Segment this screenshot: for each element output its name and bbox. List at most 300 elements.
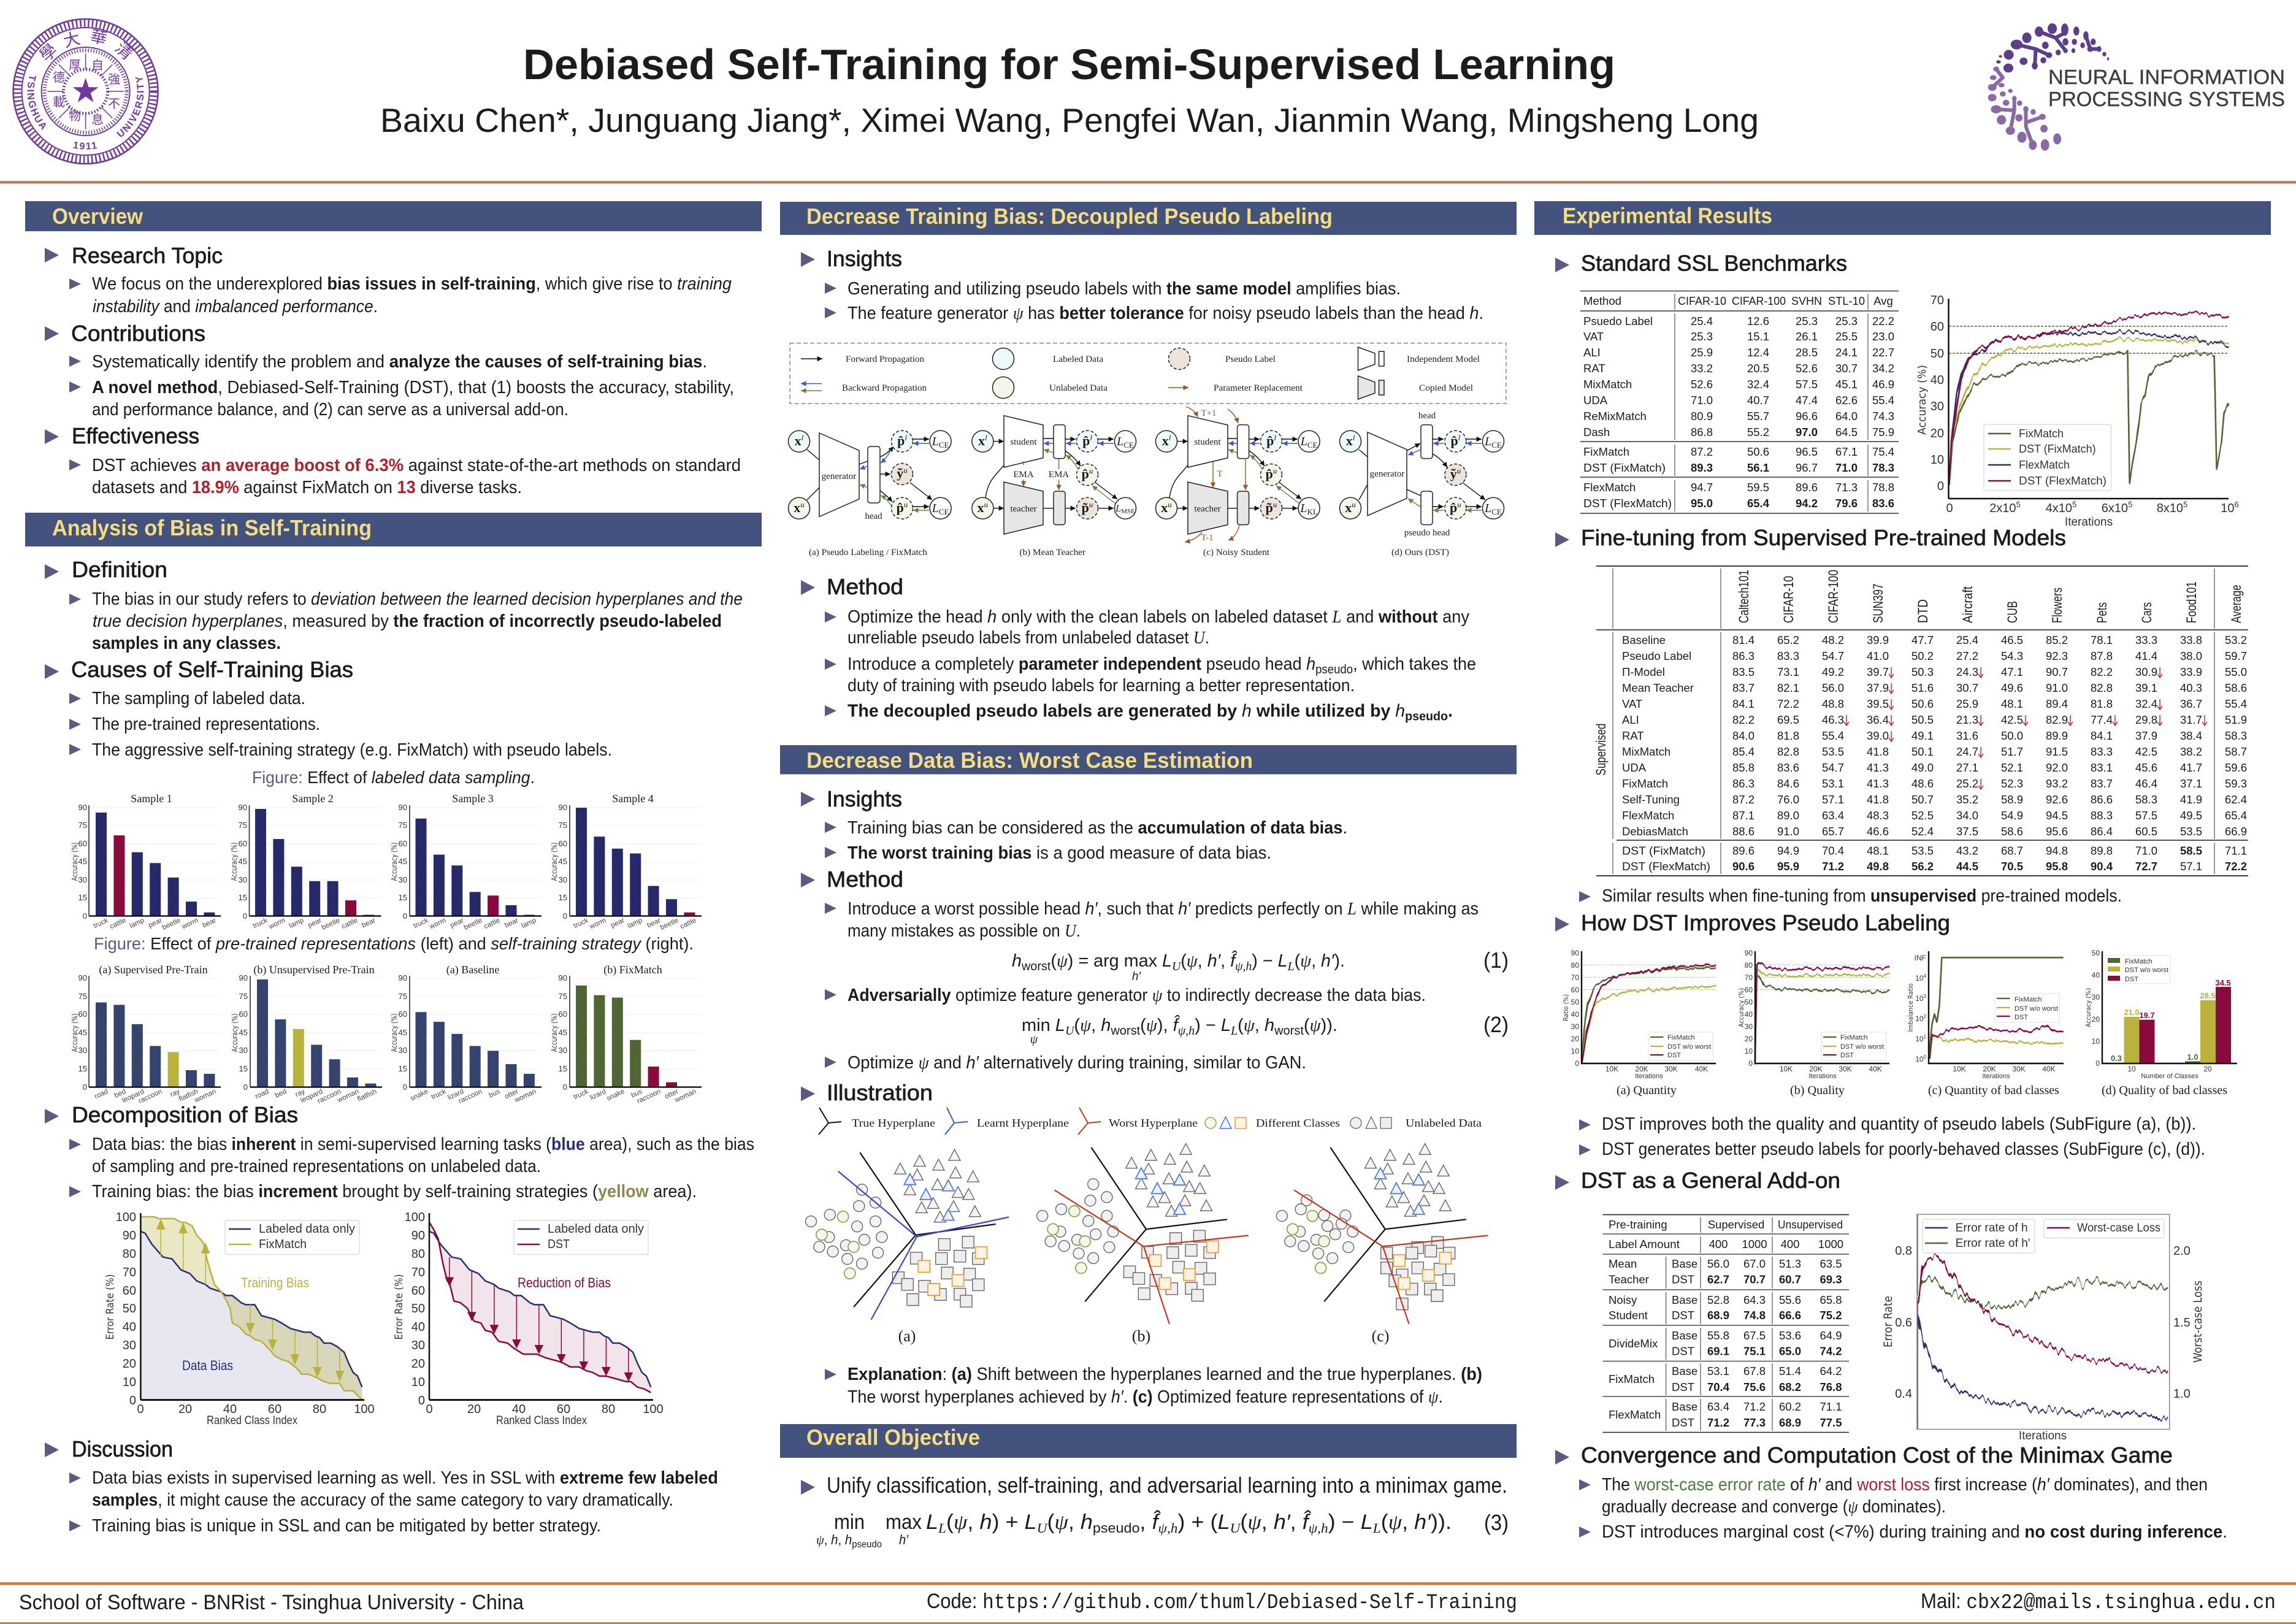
line chart: quantity: 20 <box>1571 1035 1579 1043</box>
text block: pseudo labeling improvements <box>1579 1114 2205 1159</box>
text block: decomposition <box>69 1135 754 1201</box>
bar chart: baseline: 0 <box>403 1082 407 1092</box>
footer: mail: Mail: cbx22@mails.tsinghua.edu.cn <box>1921 1590 2276 1615</box>
bar chart: sample 2: 45 <box>239 857 247 866</box>
table: fine-tuning: 82.1 <box>1777 681 1799 694</box>
table: fine-tuning: 55.4 <box>1822 729 1844 742</box>
text block: convergence: DST introduces marginal cost (<7%) during training and no cost during inference. <box>1602 1522 2227 1542</box>
line chart: quantity of bad classes: 10K <box>1953 1065 1966 1073</box>
table: SSL benchmarks: CIFAR-100 <box>1732 294 1786 307</box>
table: SSL benchmarks: 25.9 <box>1691 346 1713 359</box>
table: fine-tuning: 72.2 <box>2225 860 2247 873</box>
table: SSL benchmarks: 15.1 <box>1747 330 1769 343</box>
table: fine-tuning: 50.5 <box>1911 713 1934 726</box>
bar chart: sample 1: truck <box>93 917 109 930</box>
text block: method: Introduce a completely parameter independent pseudo head h <box>848 654 1316 674</box>
table: fine-tuning: Π-Model <box>1622 665 1665 678</box>
table: add-on results: Pre-training <box>1609 1218 1667 1231</box>
table: fine-tuning: 91.0 <box>1777 825 1799 838</box>
equation 2: ψ, h <box>1080 1016 1111 1035</box>
table: fine-tuning: 53.5 <box>1911 844 1934 857</box>
bar chart: quality of bad classes: 1.0 <box>2187 1052 2198 1062</box>
text block: method: pseudo <box>1315 663 1353 676</box>
table: fine-tuning: 43.2 <box>1956 844 1978 857</box>
table: fine-tuning: 58.6 <box>2225 681 2247 694</box>
line chart: accuracy over iterations: 30 <box>1931 400 1944 413</box>
bar chart: sample 4: Accuracy (%) <box>550 842 559 881</box>
table: fine-tuning: 50.7 <box>1911 793 1934 806</box>
line chart: accuracy over iterations: 0 <box>1937 480 1944 493</box>
heading: decrease data bias: Decrease Data Bias: Worst Case Estimation <box>806 748 1253 773</box>
table: add-on results: Base <box>1672 1400 1697 1413</box>
bar chart: sample 1: bear <box>201 917 217 929</box>
table: SSL benchmarks: 87.2 <box>1691 445 1713 458</box>
table: SSL benchmarks: DST (FlexMatch) <box>1583 497 1672 510</box>
bar chart: sample 1: 30 <box>78 875 87 884</box>
diagram: ours DST: L <box>1485 435 1491 448</box>
line chart: accuracy over iterations: DST (FlexMatch) <box>2019 475 2107 487</box>
table: fine-tuning: 25.4 <box>1956 634 1978 646</box>
table: fine-tuning: 83.6 <box>1777 761 1799 774</box>
bar chart: sample 2: worm <box>267 917 286 931</box>
chart: training bias: Error Rate (%) <box>104 1274 117 1339</box>
table: fine-tuning: 41.4 <box>2135 649 2157 662</box>
line chart: accuracy over iterations: 2x10 <box>1989 500 2021 515</box>
line chart: quantity: 20K <box>1635 1065 1648 1073</box>
diagram: pseudo labeling fixmatch <box>789 431 951 557</box>
text block: definition: samples in any classes. <box>92 634 281 653</box>
table: fine-tuning: 81.8 <box>1777 729 1799 742</box>
diagram: ours DST: u <box>1457 466 1461 475</box>
table: fine-tuning: Baseline <box>1622 634 1666 646</box>
equation 2: min L <box>1022 1016 1065 1035</box>
table: fine-tuning: 50.3 <box>1911 665 1934 678</box>
diagram: noisy student: teacher <box>1194 504 1221 514</box>
table: SSL benchmarks: 28.5 <box>1796 346 1818 359</box>
table: SSL benchmarks: 25.3 <box>1691 330 1713 343</box>
text block: unify: Unify classification, self-training, and adversarial learning into a minimax game. <box>827 1473 1507 1498</box>
table: fine-tuning: SUN397 <box>1870 584 1886 623</box>
line chart: accuracy over iterations: 5 <box>2183 500 2187 509</box>
table: fine-tuning: 59.3 <box>2225 777 2247 790</box>
chart: reduction of bias: Error Rate (%) <box>393 1274 405 1339</box>
line chart: error rate and worst-case loss: 0.4 <box>1895 1387 1912 1401</box>
equation 3: ) <box>1328 1511 1336 1534</box>
line chart: quantity: 40 <box>1571 1010 1579 1019</box>
diagram: ours DST: x <box>1345 500 1352 515</box>
table: fine-tuning: 57.1 <box>1822 793 1844 806</box>
diagram: pseudo labeling fixmatch: x <box>795 433 802 448</box>
table: SSL benchmarks: 55.4 <box>1872 394 1894 407</box>
equation 3: , <box>1139 1511 1146 1534</box>
bar chart: sample 2: 90 <box>239 803 247 812</box>
table: fine-tuning: 55.4 <box>2225 697 2247 710</box>
legend: hyperplanes: Different Classes <box>1256 1117 1340 1129</box>
heading: analysis of bias <box>25 513 762 546</box>
table: fine-tuning: 82.9 <box>2046 713 2068 726</box>
table: fine-tuning: 50.2 <box>1911 649 1934 662</box>
bar chart: baseline: lizard <box>446 1088 465 1101</box>
table: fine-tuning: 49.1 <box>1911 729 1934 742</box>
diagram: mean teacher: teacher <box>1010 504 1037 514</box>
bar chart: unsupervised pre-train: raccoon <box>316 1088 342 1105</box>
table: fine-tuning: 25.2 <box>1956 777 1978 790</box>
legend: hyperplanes: True Hyperplane <box>852 1117 935 1129</box>
bar chart: unsupervised pre-train <box>231 963 382 1105</box>
diagram: ours DST: p̂ <box>1450 433 1458 448</box>
bar chart: supervised pre-train: 45 <box>78 1028 87 1037</box>
diagram: pseudo labeling fixmatch: p̂ <box>897 500 904 515</box>
scatter captions: (a) <box>898 1327 916 1345</box>
table: fine-tuning: 44.5 <box>1956 860 1978 873</box>
table: fine-tuning: DST (FlexMatch) <box>1622 860 1710 873</box>
table: add-on results: Mean <box>1609 1257 1637 1270</box>
table: fine-tuning: 92.3 <box>2046 649 2068 662</box>
legend: hyperplanes: Learnt Hyperplane <box>977 1117 1069 1129</box>
line chart: quantity: 50 <box>1571 998 1579 1006</box>
table: fine-tuning: 37.1 <box>2180 777 2202 790</box>
table: add-on results: DST <box>1672 1416 1694 1429</box>
legend: model diagrams: Pseudo Label <box>1225 354 1276 364</box>
chart: training bias: 80 <box>123 1247 136 1261</box>
bar chart: unsupervised pre-train: flatfish <box>356 1088 378 1103</box>
bar chart: quality of bad classes: FixMatch <box>2125 958 2152 965</box>
equation 1: ) <box>1252 951 1258 971</box>
table: fine-tuning: 46.5 <box>2001 634 2023 646</box>
table: add-on results: Unsupervised <box>1778 1218 1843 1231</box>
line chart: quality: FixMatch <box>1840 1034 1868 1041</box>
table: fine-tuning: 37.9 <box>1867 681 1889 694</box>
bar chart: sample 3: truck <box>413 917 429 930</box>
table: SSL benchmarks: 64.5 <box>1835 426 1858 439</box>
table: fine-tuning: 83.7 <box>1732 681 1755 694</box>
bar chart: sample 4: Sample 4 <box>612 792 654 805</box>
table: fine-tuning: 94.8 <box>2046 844 2068 857</box>
text block: unsupervised note: Similar results when fine-tuning from unsupervised pre-trained models. <box>1602 886 2122 906</box>
table: SSL benchmarks <box>1580 291 1899 513</box>
table: add-on results: 1000 <box>1742 1238 1767 1251</box>
table: add-on results: Teacher <box>1609 1273 1649 1286</box>
chart: training bias: 100 <box>116 1211 136 1224</box>
table: fine-tuning: 90.4 <box>2091 860 2113 873</box>
logo: NeurIPS <box>1988 23 2285 151</box>
table: add-on results: 52.8 <box>1707 1293 1729 1306</box>
text block: insights: Training bias can be considered as the accumulation of data bias. <box>848 818 1347 838</box>
table: SSL benchmarks: 74.3 <box>1872 410 1894 423</box>
table: SSL benchmarks: 78.8 <box>1872 481 1894 494</box>
diagram: ours DST: CE <box>1491 507 1502 516</box>
text block: contributions: A novel method, Debiased-Self-Training (DST), that (1) boosts the accuracy, stability, <box>92 378 734 397</box>
line chart: quality: 80 <box>1745 961 1753 970</box>
table: fine-tuning: 42.5 <box>2135 745 2157 758</box>
line chart: quantity: 10 <box>1571 1047 1579 1055</box>
table: SSL benchmarks: 40.7 <box>1747 394 1769 407</box>
bar chart: sample 2: 15 <box>239 893 247 902</box>
bar chart: baseline: raccoon <box>457 1088 483 1105</box>
table: fine-tuning: 57.1 <box>2180 860 2202 873</box>
heading: decrease data bias <box>780 745 1517 774</box>
line chart: quantity of bad classes: DST w/o worst <box>2015 1005 2058 1013</box>
equation 3: f̂ <box>1152 1510 1161 1534</box>
diagram: noisy student: p̂ <box>1266 433 1274 448</box>
equation 3: h′ <box>899 1532 909 1547</box>
table: fine-tuning: CIFAR-10 <box>1781 576 1796 623</box>
equation 1: h <box>1012 951 1022 971</box>
diagram: noisy student: CE <box>1307 440 1318 450</box>
line chart: quality: Iterations <box>1808 1073 1837 1080</box>
table: SSL benchmarks: 64.0 <box>1835 410 1858 423</box>
table: fine-tuning: 84.6 <box>1777 777 1799 790</box>
table: fine-tuning: 94.9 <box>1777 844 1799 857</box>
table: fine-tuning: 87.8 <box>2091 649 2113 662</box>
line chart: quantity of bad classes: Imbalance Ratio <box>1907 983 1915 1032</box>
bar chart: sample 2: Accuracy (%) <box>230 842 239 881</box>
line chart: quality <box>1737 949 1889 1097</box>
subheading: research topic: Research Topic <box>72 243 223 268</box>
table: add-on results: 55.6 <box>1779 1293 1801 1306</box>
table: add-on results: Supervised <box>1708 1218 1764 1231</box>
heading: overall objective <box>780 1424 1517 1458</box>
equation 1: ( <box>1295 951 1301 971</box>
table: fine-tuning: 39.9 <box>1867 634 1889 646</box>
table: add-on results: 68.9 <box>1779 1416 1801 1429</box>
legend: hyperplanes <box>819 1108 1482 1135</box>
line chart: quantity: 40K <box>1695 1065 1708 1073</box>
text block: definition: true decision hyperplanes, measured by the fraction of incorrectly pseudo-labeled <box>93 611 722 631</box>
diagram: noisy student: L <box>1301 435 1307 448</box>
bar chart: fixmatch: 90 <box>559 973 567 982</box>
line chart: error rate and worst-case loss: Iterations <box>2019 1430 2067 1442</box>
line chart: quantity: 30K <box>1664 1065 1678 1073</box>
table: fine-tuning: 95.9 <box>1777 860 1799 873</box>
table: fine-tuning: 48.1 <box>1867 844 1889 857</box>
bar chart: sample 1: lamp <box>129 917 145 930</box>
table: fine-tuning: 29.8 <box>2135 713 2157 726</box>
table: add-on results: 77.3 <box>1743 1416 1766 1429</box>
scatter: panel c optimized representations <box>1276 1144 1488 1324</box>
chart: reduction of bias: Reduction of Bias <box>518 1275 611 1290</box>
subheading: method: Method <box>827 574 903 599</box>
line chart: accuracy over iterations: FixMatch <box>2019 427 2064 440</box>
bar chart: quality of bad classes: 20 <box>2092 1015 2100 1024</box>
bar chart: sample 3: worm <box>428 917 447 931</box>
equation 1: ψ, h′, f̂ <box>1187 951 1235 971</box>
bar chart: sample 1: 45 <box>78 857 87 866</box>
table: SSL benchmarks: VAT <box>1583 330 1604 343</box>
diagram: ours DST: (d) Ours (DST) <box>1391 548 1449 557</box>
table: SSL benchmarks: 62.6 <box>1835 394 1858 407</box>
bar chart: quality of bad classes: 28.5 <box>2200 991 2216 1000</box>
table: fine-tuning: 38.0 <box>2180 649 2202 662</box>
bar chart: sample 3: 75 <box>399 821 407 830</box>
table: SSL benchmarks: 96.6 <box>1796 410 1818 423</box>
equation 3: U <box>1037 1520 1049 1536</box>
line chart: quantity of bad classes: 10 <box>1915 1014 1924 1023</box>
subheading: causes: Causes of Self-Training Bias <box>71 657 353 682</box>
legend: hyperplanes: Worst Hyperplane <box>1109 1117 1198 1129</box>
table: fine-tuning: UDA <box>1622 761 1647 774</box>
line chart: quantity: DST <box>1667 1052 1681 1059</box>
diagram: mean teacher: L <box>1117 435 1123 448</box>
table: fine-tuning: 24.7 <box>1956 745 1978 758</box>
bar chart: supervised pre-train: raccoon <box>137 1088 163 1105</box>
bar chart: sample 2: 60 <box>239 839 247 848</box>
bar chart: sample 1: 90 <box>78 803 87 812</box>
table: SSL benchmarks: 79.6 <box>1835 497 1858 510</box>
table: fine-tuning: 53.2 <box>2225 634 2247 646</box>
bar chart: supervised pre-train <box>71 963 221 1105</box>
bar chart: baseline: woman <box>513 1088 537 1105</box>
table: SSL benchmarks: 33.2 <box>1691 362 1713 375</box>
line chart: accuracy over iterations: 20 <box>1931 427 1944 440</box>
table: fine-tuning: ALI <box>1622 713 1639 726</box>
line chart: quality: 50 <box>1745 998 1753 1006</box>
table: SSL benchmarks: 20.5 <box>1747 362 1769 375</box>
diagram: mean teacher: L <box>1115 504 1121 514</box>
table: fine-tuning: 91.5 <box>2046 745 2068 758</box>
bar chart: sample 3 <box>390 792 541 932</box>
table: fine-tuning: 92.0 <box>2046 761 2068 774</box>
table: fine-tuning: 52.3 <box>2001 777 2023 790</box>
line chart: quantity: FixMatch <box>1667 1034 1695 1041</box>
table: fine-tuning: 73.1 <box>1777 665 1799 678</box>
bar chart: unsupervised pre-train: road <box>254 1088 270 1100</box>
equation 1: ψ, h′). <box>1300 951 1345 971</box>
diagram: noisy student: x <box>1162 433 1169 448</box>
table: SSL benchmarks: 59.5 <box>1747 481 1769 494</box>
table: fine-tuning: 46.3 <box>1822 713 1844 726</box>
line chart: quantity: 90 <box>1571 949 1579 957</box>
logo: Tsinghua University seal: 1911 <box>73 142 97 150</box>
chart: reduction of bias: 80 <box>411 1247 425 1261</box>
line chart: quality: 30K <box>1839 1065 1852 1073</box>
table: add-on results: 53.6 <box>1779 1329 1801 1342</box>
line chart: quality: 10K <box>1780 1065 1793 1073</box>
diagram: noisy student: u <box>1273 500 1277 509</box>
table: fine-tuning: 45.6 <box>2135 761 2157 774</box>
table: fine-tuning: 38.2 <box>2180 745 2202 758</box>
bar chart: sample 3: bear <box>503 917 519 929</box>
equation 2: ψ <box>1030 1033 1038 1046</box>
table: fine-tuning: 58.3 <box>2135 793 2157 806</box>
table: fine-tuning: 84.0 <box>1732 729 1755 742</box>
diagram: ours DST: pseudo head <box>1404 528 1450 538</box>
bar chart: supervised pre-train: (a) Supervised Pre-Train <box>99 963 208 976</box>
table: fine-tuning: 41.7 <box>2180 761 2202 774</box>
bar chart: quality of bad classes: DST <box>2125 976 2138 983</box>
table: add-on results: 71.2 <box>1707 1416 1729 1429</box>
bar chart: sample 4: pear <box>610 917 626 929</box>
panel: worst case estimation <box>780 745 1517 1407</box>
line chart: accuracy over iterations: 6 <box>2235 500 2239 509</box>
table: SSL benchmarks: SVHN <box>1791 294 1822 307</box>
bar chart: fixmatch: 60 <box>559 1009 567 1019</box>
text block: discussion <box>69 1468 718 1536</box>
table: fine-tuning: Average <box>2229 584 2244 623</box>
table: add-on results: 56.0 <box>1707 1257 1729 1270</box>
bar chart: fixmatch: woman <box>673 1088 697 1105</box>
equation 2: worst <box>1274 1024 1304 1038</box>
chart: reduction of bias: 60 <box>557 1403 570 1416</box>
line chart: quantity <box>1562 949 1716 1097</box>
equation 1: worst <box>1021 960 1051 973</box>
line chart: quality: DST w/o worst <box>1840 1043 1884 1051</box>
bar chart: fixmatch <box>550 963 702 1105</box>
heading: overall objective: Overall Objective <box>806 1425 980 1450</box>
logo: Tsinghua University seal: 息 <box>91 110 104 128</box>
chart: reduction of bias: 50 <box>411 1302 425 1316</box>
bar chart: quality of bad classes: 20 <box>2203 1065 2212 1073</box>
table: SSL benchmarks: 52.6 <box>1796 362 1818 375</box>
diagram: mean teacher <box>972 416 1136 557</box>
table: fine-tuning: 21.3 <box>1956 713 1978 726</box>
subheading: DST as a general add-on: DST as a General Add-on <box>1581 1168 1840 1193</box>
bar chart: sample 1: worm <box>180 917 199 931</box>
bar chart: sample 2: 75 <box>239 821 247 830</box>
text block: method: The decoupled pseudo labels are generated by h while utilized by h <box>848 702 1405 721</box>
line chart: quantity of bad classes: 2 <box>1924 1014 1927 1019</box>
equation 1: ψ,h <box>1235 960 1252 973</box>
subheading: discussion: Discussion <box>72 1436 173 1461</box>
bar chart: sample 4: worm <box>588 917 607 931</box>
diagram: noisy student: T <box>1217 469 1223 479</box>
chart: training bias: 40 <box>223 1403 237 1416</box>
line chart: quality: 70 <box>1745 973 1753 982</box>
table: fine-tuning: 47.7 <box>1911 634 1934 646</box>
text block: method: , which takes the <box>1353 654 1476 674</box>
text block: discussion: Training bias is unique in SSL and can be mitigated by better strategy. <box>92 1516 601 1536</box>
table: fine-tuning <box>1593 566 2248 876</box>
bar chart: supervised pre-train: road <box>93 1088 109 1100</box>
legend: model diagrams: Copied Model <box>1419 383 1473 393</box>
line chart: error rate and worst-case loss: Error rate of h <box>1956 1222 2028 1235</box>
table: SSL benchmarks: 80.9 <box>1691 410 1713 423</box>
table: fine-tuning: 56.0 <box>1822 681 1844 694</box>
diagram: noisy student: l <box>1169 433 1171 442</box>
chart: training bias: 80 <box>313 1403 326 1416</box>
text block: causes: The sampling of labeled data. <box>92 689 305 708</box>
table: add-on results: DST <box>1672 1309 1694 1322</box>
line chart: accuracy over iterations: 5 <box>2072 500 2076 509</box>
logo: NeurIPS: NEURAL INFORMATION <box>2048 66 2285 88</box>
table: SSL benchmarks: 96.5 <box>1796 445 1818 458</box>
footer <box>0 1582 2296 1624</box>
subheading: method: Method <box>827 867 903 892</box>
line chart: accuracy over iterations: 60 <box>1931 320 1944 334</box>
bar chart: fixmatch: 30 <box>559 1046 567 1055</box>
text block: method: unreliable pseudo labels from unlabeled dataset U. <box>848 628 1209 648</box>
table: fine-tuning: 49.0 <box>1911 761 1934 774</box>
bar chart: sample 3: 45 <box>399 857 407 866</box>
diagram: ours DST: l <box>1458 433 1461 442</box>
table: fine-tuning: 85.2 <box>2046 634 2068 646</box>
text block: insights: The worst training bias is a good measure of data bias. <box>848 843 1271 863</box>
line chart: error rate and worst-case loss: Error rate of h' <box>1956 1237 2030 1250</box>
table: add-on results: 75.6 <box>1743 1381 1766 1393</box>
equation 1: (1) <box>1483 948 1509 973</box>
bar chart: sample 1: 15 <box>78 893 87 902</box>
table: fine-tuning: 69.5 <box>1777 713 1799 726</box>
bar chart: baseline: Accuracy (%) <box>390 1013 399 1052</box>
table: fine-tuning: 81.8 <box>2091 697 2113 710</box>
chart: training bias: 30 <box>123 1339 136 1352</box>
diagram: ours DST: L <box>1485 502 1491 515</box>
diagram: mean teacher: u <box>1089 500 1093 509</box>
table: SSL benchmarks: 57.5 <box>1796 378 1818 391</box>
line chart: accuracy over iterations: 5 <box>2016 500 2021 509</box>
table: fine-tuning: 54.7 <box>1822 649 1844 662</box>
equation 2: ( <box>1238 1016 1244 1035</box>
